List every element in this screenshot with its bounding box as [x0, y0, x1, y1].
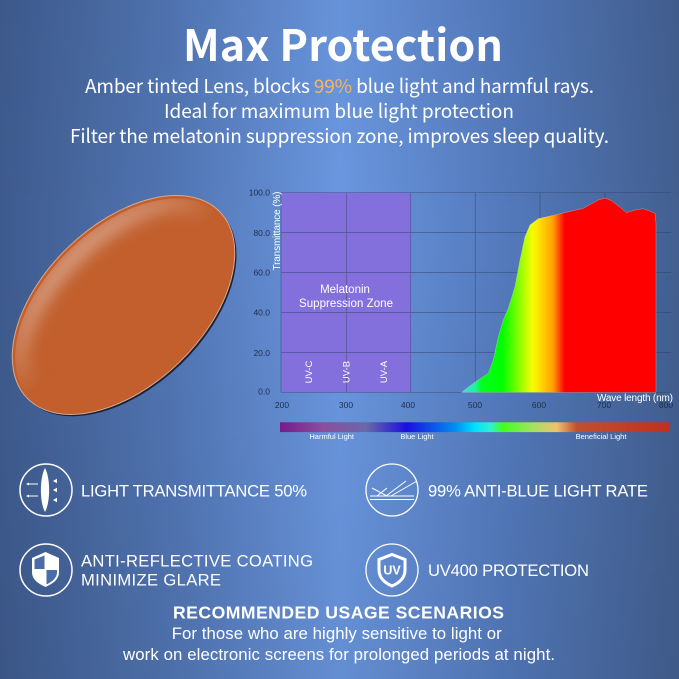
spectrum bar: Beneficial Light	[576, 432, 627, 441]
y axis title: Transmittance (%)	[272, 192, 283, 270]
x axis labels	[275, 400, 673, 410]
y axis labels: 100.0	[249, 188, 270, 198]
label	[81, 552, 313, 590]
spectrum bar	[280, 422, 670, 441]
label: 99% ANTI-BLUE LIGHT RATE	[428, 482, 648, 500]
intro text block: Amber tinted Lens, blocks 99% blue light and harmful rays.	[85, 72, 594, 99]
lens illustration	[12, 195, 236, 416]
grid lines	[281, 193, 671, 392]
UV labels	[304, 360, 390, 383]
usage text: work on electronic screens for prolonged periods at night.	[122, 645, 555, 664]
zone label: Melatonin	[320, 284, 370, 296]
x axis labels: 200	[275, 400, 289, 410]
UV labels: UV-C	[304, 361, 315, 383]
intro text block: Ideal for maximum blue light protection	[164, 97, 514, 124]
icon: uv shield: UV	[383, 564, 401, 578]
feature: anti-blue	[366, 464, 648, 516]
intro text block: Filter the melatonin suppression zone, improves sleep quality.	[70, 122, 609, 149]
x axis labels: 700	[597, 400, 611, 410]
x axis labels: 300	[339, 400, 353, 410]
icon: lens with arrows	[20, 464, 72, 516]
x axis labels: 400	[401, 400, 415, 410]
y axis labels: 40.0	[253, 308, 270, 318]
transmittance curve	[462, 198, 656, 392]
icon: uv shield	[366, 544, 418, 596]
x axis labels: 800	[659, 400, 673, 410]
intro text block	[70, 72, 609, 149]
UV labels: UV-B	[342, 361, 352, 383]
y axis labels: 60.0	[253, 268, 270, 278]
y axis labels	[249, 188, 270, 396]
x axis labels: 500	[468, 400, 482, 410]
spectrum bar: Harmful Light	[309, 432, 355, 441]
x axis labels: 600	[532, 400, 546, 410]
zone label: Suppression Zone	[299, 298, 393, 310]
UV labels: UV-A	[379, 360, 390, 383]
label: ANTI-REFLECTIVE COATING	[81, 552, 313, 571]
zone label	[299, 284, 393, 310]
feature: uv400	[366, 544, 589, 596]
transmittance chart	[249, 188, 673, 410]
recommended usage heading: RECOMMENDED USAGE SCENARIOS	[173, 602, 504, 622]
y axis labels: 0.0	[258, 386, 270, 396]
y axis labels: 80.0	[253, 228, 270, 238]
feature: anti-reflective	[20, 544, 313, 596]
label: UV400 PROTECTION	[428, 561, 589, 580]
x axis title: Wave length (nm)	[597, 393, 673, 404]
title: Max Protection	[183, 12, 503, 74]
melatonin suppression zone	[281, 193, 411, 392]
icon: shield	[20, 544, 72, 596]
label: MINIMIZE GLARE	[81, 571, 221, 590]
y axis labels: 20.0	[253, 348, 270, 358]
spectrum bar: Blue Light	[400, 432, 435, 441]
usage text: For those who are highly sensitive to light or	[172, 624, 502, 643]
label: LIGHT TRANSMITTANCE 50%	[81, 482, 307, 500]
usage text	[122, 624, 555, 664]
feature: light transmittance	[20, 464, 307, 516]
icon: reflection	[366, 464, 418, 516]
